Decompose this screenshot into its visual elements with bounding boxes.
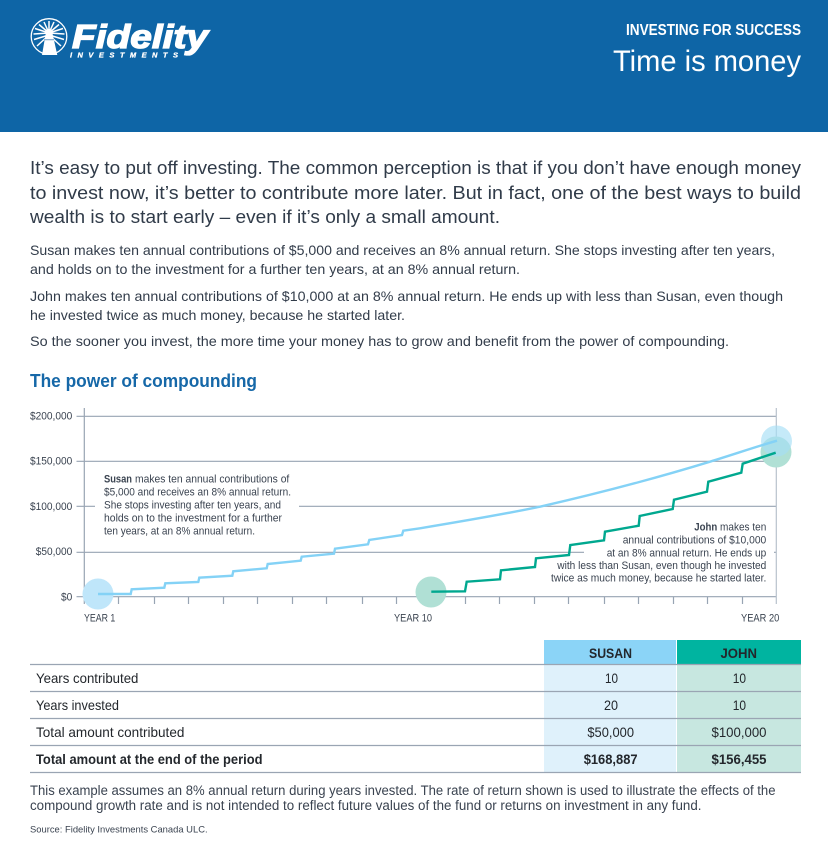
y axis labels: $0 <box>61 591 72 603</box>
y axis labels: $100,000 <box>30 501 72 513</box>
row: total contributed: Total amount contributed <box>36 724 184 740</box>
row: total contributed: $50,000 <box>587 724 634 740</box>
y axis labels: $150,000 <box>30 456 72 468</box>
body text: John makes ten annual contributions of $10,000 at an 8% annual return. He ends up with less than Susan, even though <box>30 288 783 304</box>
John callout: at an 8% annual return. He ends up <box>607 548 766 560</box>
y axis labels: $200,000 <box>30 410 72 422</box>
John line <box>431 453 776 592</box>
Susan callout: makes ten annual contributions of <box>135 474 289 486</box>
row: total at end: Total amount at the end of the period <box>36 751 262 767</box>
x axis labels: YEAR 20 <box>741 613 779 625</box>
row: total at end: $156,455 <box>712 751 767 767</box>
x axis labels <box>84 613 779 625</box>
row: years invested: 10 <box>733 697 746 713</box>
intro paragraph: wealth is to start early – even if it’s only a small amount. <box>29 206 500 227</box>
body text: he invested twice as much money, because he started later. <box>30 307 405 323</box>
y axis labels <box>30 410 72 603</box>
John callout: makes ten <box>720 522 766 534</box>
Susan callout: holds on to the investment for a further <box>104 513 282 525</box>
Susan callout: ten years, at an 8% annual return. <box>104 526 255 538</box>
body text: So the sooner you invest, the more time your money has to grow and benefit from the power of compounding. <box>30 333 729 349</box>
John callout: annual contributions of $10,000 <box>623 535 766 547</box>
row: years contributed <box>36 670 746 686</box>
header banner <box>0 0 828 132</box>
disclaimer: This example assumes an 8% annual return during years invested. The rate of return shown is used to illustrate the effects of the <box>30 783 776 798</box>
body text: Susan makes ten annual contributions of $5,000 and receives an 8% annual return. She stops investing after ten years, <box>30 242 775 258</box>
row: years invested <box>36 697 746 713</box>
logo: Fidelity Investments: INVESTMENTS <box>70 50 178 60</box>
header title: Time is money <box>613 45 801 78</box>
marker circles <box>82 426 792 610</box>
y axis labels: $50,000 <box>36 546 72 558</box>
John callout: with less than Susan, even though he invested <box>556 560 766 572</box>
row: total contributed <box>36 724 767 740</box>
John column <box>677 664 801 773</box>
body text: and holds on to the investment for a further ten years, at an 8% annual return. <box>30 261 520 277</box>
Susan header: SUSAN <box>589 645 632 661</box>
Susan header <box>544 640 676 664</box>
Susan callout: Susan <box>104 474 132 486</box>
John callout: twice as much money, because he started later. <box>551 573 766 585</box>
row: total at end <box>36 751 767 767</box>
row: total at end: $168,887 <box>584 751 638 767</box>
header kicker: INVESTING FOR SUCCESS <box>626 22 801 39</box>
Susan callout: She stops investing after ten years, and <box>104 500 281 512</box>
Susan callout <box>104 474 291 538</box>
intro paragraph <box>29 157 802 227</box>
disclaimer <box>30 783 776 813</box>
John header <box>677 640 801 664</box>
logo: Fidelity Investments: Fidelity <box>72 18 210 55</box>
Susan callout: $5,000 and receives an 8% annual return. <box>104 487 291 499</box>
source: Source: Fidelity Investments Canada ULC. <box>30 824 208 836</box>
disclaimer: compound growth rate and is not intended to reflect future values of the fund or returns on investment in any fund. <box>30 798 702 813</box>
line chart <box>30 408 792 625</box>
row: total contributed: $100,000 <box>712 724 767 740</box>
body text <box>30 242 783 349</box>
row: years contributed: 10 <box>605 670 618 686</box>
comparison table <box>30 640 801 773</box>
chart heading: The power of compounding <box>30 370 257 391</box>
John callout: John <box>694 522 717 534</box>
Susan line <box>98 441 777 594</box>
row: years contributed: 10 <box>733 670 746 686</box>
intro paragraph: to invest now, it’s better to contribute more later. But in fact, one of the best ways to build <box>30 182 801 203</box>
x axis labels: YEAR 10 <box>394 613 432 625</box>
John callout <box>551 522 766 585</box>
intro paragraph: It’s easy to put off investing. The common perception is that if you don’t have enough money <box>30 157 802 178</box>
row: years invested: Years invested <box>36 697 119 713</box>
x axis labels: YEAR 1 <box>84 613 115 625</box>
John header: JOHN <box>720 645 757 661</box>
row: years invested: 20 <box>604 697 618 713</box>
Susan column <box>544 664 676 773</box>
logo: Fidelity Investments <box>31 18 210 60</box>
row: years contributed: Years contributed <box>36 670 138 686</box>
